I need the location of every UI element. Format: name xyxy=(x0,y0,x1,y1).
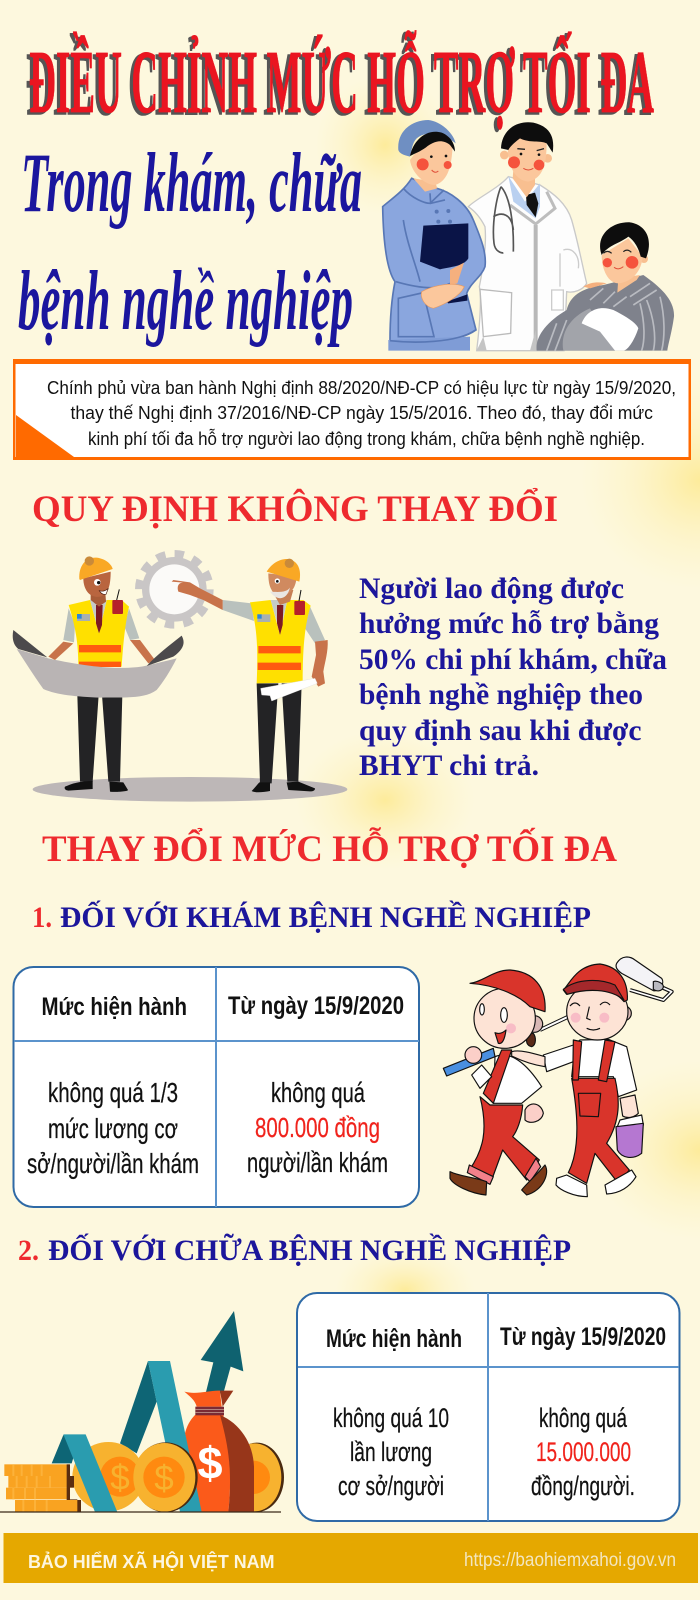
table 1 new value xyxy=(247,1077,388,1178)
zigzag line large xyxy=(52,1361,202,1512)
illustration: two engineers with plan and gear xyxy=(13,554,347,802)
right coin xyxy=(228,1443,284,1512)
corner triangle xyxy=(16,415,74,457)
ground shadow xyxy=(33,777,347,802)
footer bar xyxy=(4,1533,698,1583)
table 2 new value: không quá xyxy=(539,1403,628,1433)
table 1 new value: người/lần khám xyxy=(247,1147,388,1178)
money bag: $ xyxy=(197,1438,223,1489)
intro text xyxy=(47,378,676,449)
table 2 new value xyxy=(531,1403,635,1501)
right engineer xyxy=(172,559,328,792)
zigzag line small xyxy=(63,1434,117,1512)
body text: unchanged rule: bệnh nghề nghiệp theo xyxy=(359,678,643,711)
gear xyxy=(139,554,210,625)
table 2 headers xyxy=(326,1323,666,1353)
intro text: kinh phí tối đa hỗ trợ người lao động trong khám, chữa bệnh nghề nghiệp. xyxy=(88,428,645,449)
section heading 2: ĐỐI VỚI CHỮA BỆNH NGHỀ NGHIỆP xyxy=(48,1233,571,1267)
table 1 headers: Từ ngày 15/9/2020 xyxy=(228,992,404,1020)
body text: unchanged rule: 50% chi phí khám, chữa xyxy=(359,643,667,676)
ground line xyxy=(0,1510,281,1514)
subtitle xyxy=(18,136,362,348)
subtitle: bệnh nghề nghiệp xyxy=(18,254,353,348)
patient xyxy=(537,222,674,351)
body text: unchanged rule xyxy=(359,572,667,782)
table 1 headers: Mức hiện hành xyxy=(42,993,187,1021)
table 1: examination xyxy=(14,967,419,1207)
plan sheet xyxy=(13,630,184,698)
nurse xyxy=(383,120,485,351)
subtitle: Trong khám, chữa xyxy=(21,136,362,230)
table 2 current value: cơ sở/người xyxy=(338,1471,444,1501)
intro callout box xyxy=(13,359,691,460)
money bag xyxy=(184,1391,254,1512)
footer url: https://baohiemxahoi.gov.vn xyxy=(464,1550,676,1571)
heading: unchanged rule: QUY ĐỊNH KHÔNG THAY ĐỔI xyxy=(32,487,558,530)
body text: unchanged rule: quy định sau khi được xyxy=(359,714,642,747)
coin left xyxy=(72,1442,144,1511)
illustration: two workers xyxy=(443,957,672,1197)
table 2 current value: không quá 10 xyxy=(333,1403,449,1433)
table 1 new value: không quá xyxy=(271,1077,365,1108)
table 1 new value: 800.000 đồng xyxy=(255,1112,380,1143)
doctor xyxy=(468,122,587,351)
body text: unchanged rule: BHYT chi trả. xyxy=(359,749,539,782)
right worker xyxy=(512,957,672,1197)
section heading 1: ĐỐI VỚI KHÁM BỆNH NGHỀ NGHIỆP xyxy=(60,900,591,934)
table 2 current value xyxy=(333,1403,449,1501)
illustration: medical staff and patient xyxy=(383,120,674,351)
table 2 headers: Mức hiện hành xyxy=(326,1325,462,1353)
section heading 2: 2. xyxy=(18,1234,39,1267)
table 2 new value: 15.000.000 xyxy=(536,1437,631,1467)
table 1 current value: không quá 1/3 xyxy=(48,1077,178,1108)
table 2 current value: lần lương xyxy=(350,1437,432,1467)
table 1 current value: sở/người/lần khám xyxy=(27,1148,199,1179)
table 1 current value xyxy=(27,1077,199,1179)
left engineer xyxy=(48,556,155,792)
body text: unchanged rule: Người lao động được xyxy=(359,572,624,605)
table 1 current value: mức lương cơ xyxy=(48,1113,178,1144)
growth arrow xyxy=(201,1311,243,1393)
intro text: Chính phủ vừa ban hành Nghị định 88/2020/NĐ-CP có hiệu lực từ ngày 15/9/2020, xyxy=(47,378,676,398)
coin left: $ xyxy=(110,1458,130,1497)
body text: unchanged rule: hưởng mức hỗ trợ bằng xyxy=(359,607,659,640)
left worker xyxy=(443,970,547,1195)
coin middle: $ xyxy=(154,1459,174,1498)
heading: maximum support changes: THAY ĐỔI MỨC HỖ TRỢ TỐI ĐA xyxy=(42,826,617,870)
table 1 headers xyxy=(42,992,404,1021)
coin stack xyxy=(4,1464,81,1512)
coin middle xyxy=(133,1442,198,1512)
footer organization name: BẢO HIỂM XÃ HỘI VIỆT NAM xyxy=(28,1551,274,1572)
illustration: money and growth arrow xyxy=(0,1311,284,1512)
table 2 new value: đồng/người. xyxy=(531,1471,635,1501)
table 2: treatment xyxy=(297,1293,680,1521)
intro text: thay thế Nghị định 37/2016/NĐ-CP ngày 15/5/2016. Theo đó, thay đổi mức xyxy=(70,403,653,423)
section heading 1: 1. xyxy=(32,901,52,934)
